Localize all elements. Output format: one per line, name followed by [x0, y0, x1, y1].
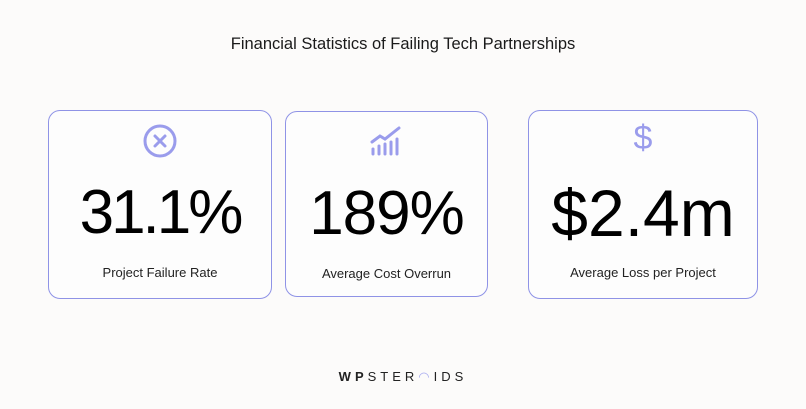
- label: Average Loss per Project: [570, 265, 716, 280]
- icon: chart: [370, 126, 400, 156]
- number: $2.4m: [551, 176, 735, 250]
- number: 189%: [309, 179, 464, 248]
- icon: x circle: [144, 124, 176, 158]
- icon: dollar: $: [634, 119, 652, 157]
- number: 31.1%: [80, 178, 240, 247]
- panel: average loss: [528, 110, 758, 299]
- label: Average Cost Overrun: [322, 266, 451, 281]
- panel: failure rate: [48, 110, 272, 299]
- logo: WPSTER◠IDS: [339, 369, 467, 384]
- label: Project Failure Rate: [103, 265, 217, 280]
- panel: cost overrun: [285, 111, 488, 297]
- title: Financial Statistics of Failing Tech Partnerships: [231, 35, 575, 53]
